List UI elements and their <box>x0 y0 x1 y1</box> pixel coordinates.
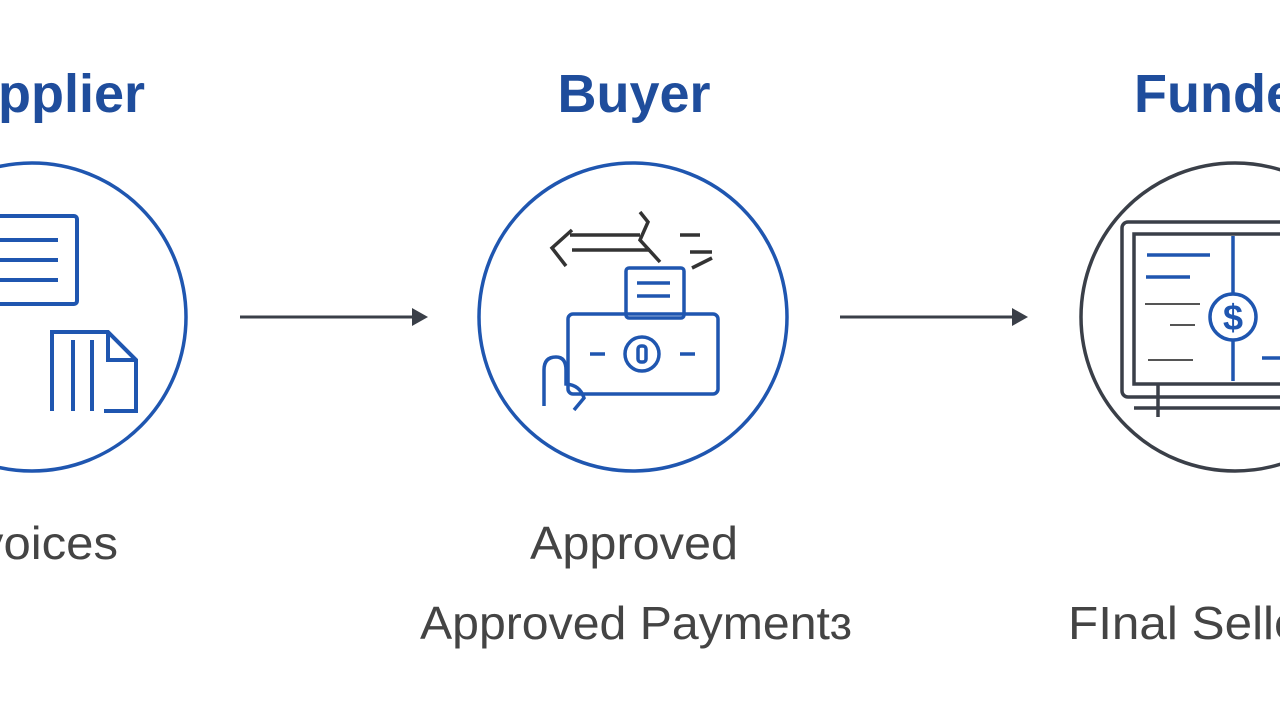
icon: invoice list <box>0 216 136 411</box>
panel: funder circle <box>1081 163 1280 471</box>
panel: supplier circle <box>0 163 186 471</box>
heading: Buyer: Buyer <box>557 64 711 124</box>
icon: monitor with dollar <box>1122 222 1280 417</box>
icon: approved payment <box>544 212 718 410</box>
arrow 1 <box>240 308 428 326</box>
arrow 2 <box>840 308 1028 326</box>
caption: approved: Approved <box>530 517 738 569</box>
icon: dollar sign: $ <box>1223 297 1243 338</box>
panel: buyer circle <box>479 163 787 471</box>
caption: approved payments: Approved Paymentɜ <box>420 597 852 649</box>
